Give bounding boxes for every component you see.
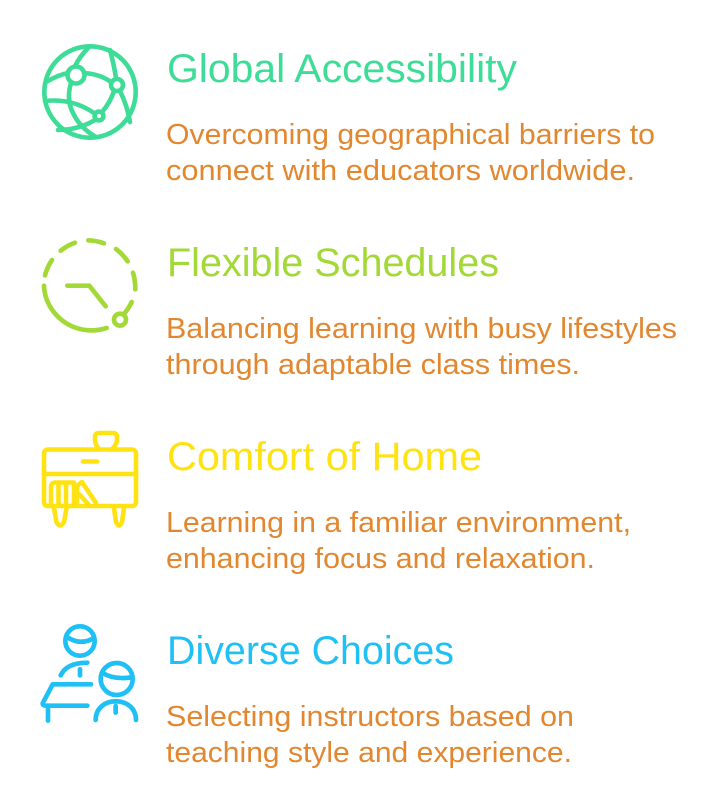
heading: Global Accessibility: Global Accessibility [167,47,517,91]
heading: Flexible Schedules: Flexible Schedules [167,241,499,285]
text: Global Accessibility description: Overcoming geographical barriers to [166,119,655,151]
text: Diverse Choices description: Selecting instructors based on [166,701,574,733]
text: Flexible Schedules description: through adaptable class times. [166,349,580,381]
icon: teacher and student [43,626,136,721]
text: Diverse Choices description: teaching style and experience. [166,737,572,769]
text: Comfort of Home description: Learning in a familiar environment, [166,507,631,539]
heading: Diverse Choices: Diverse Choices [167,629,454,673]
icon: cabinet with books [44,433,136,526]
text: Flexible Schedules description: Balancing learning with busy lifestyles [166,313,677,345]
text: Comfort of Home description: enhancing focus and relaxation. [166,543,595,575]
icon: dashed clock [44,240,135,330]
icon: globe network [44,46,136,138]
heading: Comfort of Home: Comfort of Home [167,435,482,479]
text: Global Accessibility description: connect with educators worldwide. [166,155,635,187]
